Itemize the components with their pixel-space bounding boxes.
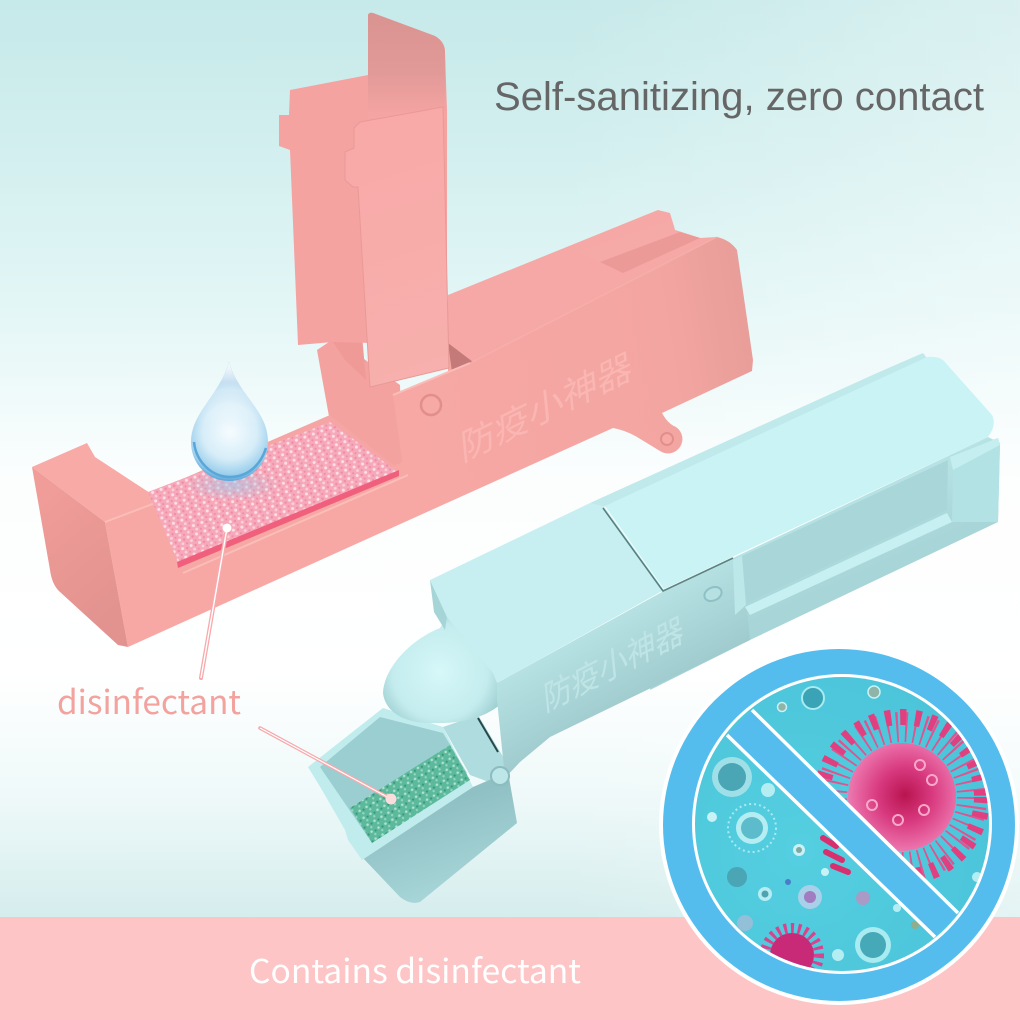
pink hinge gap [333, 335, 366, 380]
blue side rear [650, 437, 1000, 690]
badge inner white ring [692, 674, 992, 974]
pink ledge highlight [105, 363, 470, 573]
bottom pink band [0, 917, 1020, 1020]
blue lid [605, 357, 994, 589]
blue post highlight [950, 438, 1000, 470]
badge white outline [659, 645, 1019, 1005]
water drop [186, 362, 278, 501]
no-virus badge [659, 645, 1019, 1005]
blue device [308, 353, 1000, 903]
pink back flap top shade [368, 13, 446, 118]
pink device [32, 13, 753, 647]
pink tray end face [32, 467, 128, 647]
pink tray ledge [170, 462, 410, 580]
blue inner opening [430, 580, 447, 630]
blue side front [497, 556, 750, 778]
pink body top face [448, 210, 737, 372]
blue nose [383, 617, 505, 723]
title: Self-sanitizing, zero contact [494, 75, 984, 119]
blue cap rim [308, 708, 473, 860]
blue hinge slit [478, 718, 498, 752]
prohibition bar [727, 710, 958, 937]
large virus [822, 717, 982, 877]
spikes seen below the bar [823, 838, 856, 872]
pink rivet [421, 395, 441, 415]
pink tray end top [32, 443, 163, 522]
pink hole [448, 343, 473, 372]
pink back flap [279, 13, 447, 345]
pink engraved label: 防疫小神器 [458, 336, 634, 473]
pink slot floor [600, 232, 700, 273]
virus field [695, 677, 989, 971]
blue rear tab [590, 353, 930, 510]
pink top edge highlight [470, 237, 717, 363]
pink side and tray front face [105, 237, 753, 647]
blue right post [950, 438, 1000, 522]
small pink virus [765, 928, 819, 982]
green sponge [350, 745, 470, 843]
blue post front [733, 556, 746, 615]
pink sponge [148, 422, 398, 562]
pointer line: green sponge [260, 728, 396, 804]
pink inner wall [317, 338, 403, 472]
blue cap arm [443, 715, 508, 785]
disinfectant label: disinfectant [57, 676, 241, 724]
pink sponge red strip [177, 470, 399, 568]
blue recess [740, 460, 948, 603]
pointer line: pink sponge [201, 524, 232, 678]
pink front flap [345, 107, 449, 387]
blue lower lip [745, 513, 952, 615]
pink tray back floor [150, 415, 400, 565]
pink slot [578, 220, 700, 273]
blue cap outer face [362, 772, 517, 903]
blue engraved label: 防疫小神器 [541, 602, 685, 722]
badge blue ring [663, 649, 1015, 1001]
blue hinge [491, 767, 509, 785]
band caption: Contains disinfectant [249, 945, 581, 993]
small viruses [707, 686, 982, 963]
blue rivet [702, 584, 724, 604]
blue lid gap [603, 508, 733, 591]
pink lug rivet [661, 433, 673, 445]
blue top front [430, 503, 664, 683]
blue cap interior [320, 717, 467, 843]
